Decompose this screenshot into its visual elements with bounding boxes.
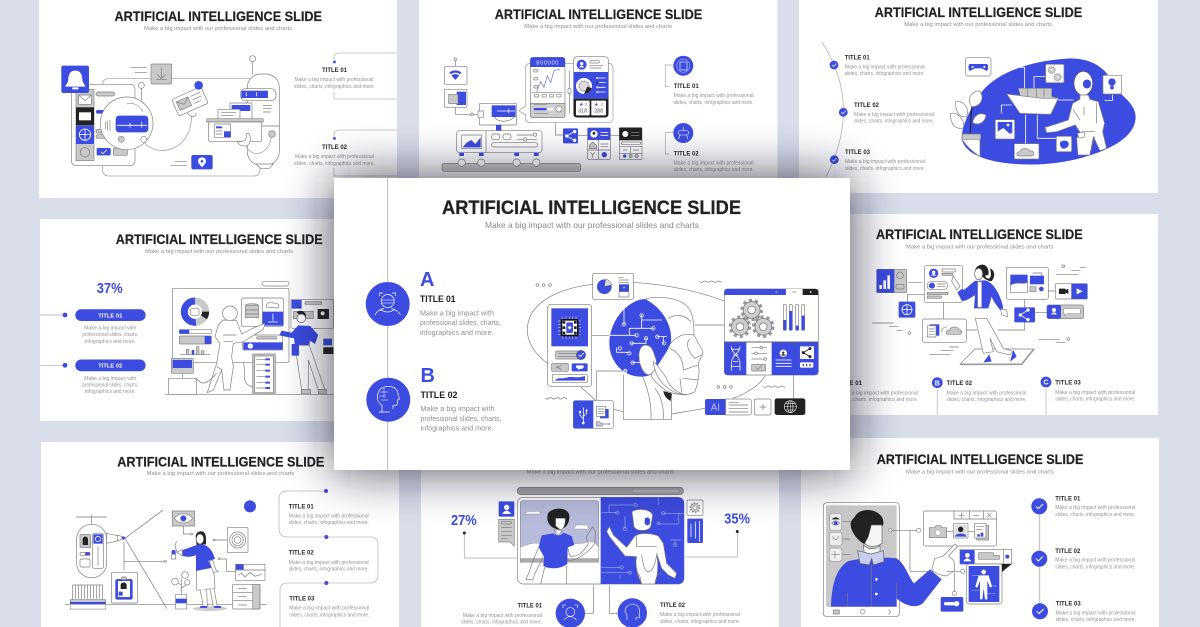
timeline: titles 01 to 03 (1031, 496, 1136, 623)
item B (366, 365, 502, 433)
illustration: AI head with interface modules (527, 273, 818, 428)
item: title 01 with icon (461, 599, 585, 627)
heading: bottom-right slide: ARTIFICIAL INTELLIGENCE SLIDE (877, 452, 1083, 467)
item: title 02 with icon (618, 598, 740, 627)
heading: bottom-left slide: ARTIFICIAL INTELLIGENCE SLIDE (117, 454, 324, 470)
subtitle: middle-left slide: Make a big impact with our professional slides and charts (145, 249, 293, 255)
timeline: titles 01 to 03: Make a big impact with professional (1056, 610, 1136, 616)
stat: 37%: 37% (97, 281, 123, 297)
timeline arc with title items: TITLE 03 (845, 149, 870, 156)
item B: TITLE 02 (420, 390, 458, 400)
item: title 01: slides, charts, infographics and more. (674, 100, 754, 106)
item: title 03 with C marker: slides, charts, infographics and more. (1055, 396, 1135, 402)
icon: robot circle (673, 123, 693, 143)
illustration: data dashboards and machine: 800000 (536, 60, 559, 66)
heading: top-right slide: ARTIFICIAL INTELLIGENCE SLIDE (875, 5, 1082, 20)
heading: center slide: ARTIFICIAL INTELLIGENCE SLIDE (442, 198, 741, 219)
timeline: titles 01 to 03: Make a big impact with professional (1055, 505, 1135, 511)
item: title 01: TITLE 01 (674, 83, 699, 90)
item: title 02 with B marker: B (935, 380, 940, 387)
item: title 03 with C marker: Make a big impact with professional (1055, 390, 1135, 396)
timeline: titles 01 to 03: TITLE 01 (1055, 496, 1081, 502)
heading: middle-left slide: ARTIFICIAL INTELLIGENCE SLIDE (116, 232, 323, 247)
item A: TITLE 01 (420, 294, 456, 304)
callout boxes: titles 01 to 03: slides, charts, infographics and more. (289, 612, 369, 618)
panel: center slide (334, 178, 850, 470)
stat: 35% (685, 512, 750, 557)
subtitle: bottom-middle slide: Make a big impact with our professional slides and charts (527, 470, 674, 476)
illustration: data dashboards and machine: 318 (578, 109, 587, 115)
timeline arc with title items: Make a big impact with professional (854, 112, 934, 118)
callout: title 02: Make a big impact with professional (295, 154, 374, 160)
timeline arc with title items: Make a big impact with professional (845, 64, 925, 70)
callout boxes: titles 01 to 03: TITLE 02 (289, 550, 314, 556)
timeline arc with title items: slides, charts, infographics and more. (845, 71, 925, 77)
item: title 01: Make a big impact with professional (674, 93, 754, 99)
item: title 02 with B marker: Make a big impact with professional (946, 390, 1026, 396)
item: title 02 with B marker: slides, charts, infographics and more. (946, 397, 1026, 403)
vertical timeline line (387, 178, 389, 470)
timeline: titles 01 to 03: Make a big impact with professional (1055, 558, 1135, 564)
callout: title 02 (294, 130, 397, 176)
item: title 02 pill: TITLE 02 (98, 364, 122, 370)
subtitle: middle-right slide: Make a big impact with our professional slides and charts (906, 245, 1054, 251)
subtitle: center slide: Make a big impact with our professional slides and charts (485, 220, 699, 230)
timeline: titles 01 to 03: TITLE 02 (1055, 548, 1081, 555)
callout boxes: titles 01 to 03: TITLE 03 (289, 596, 315, 602)
illustration: woman with floating cards (872, 265, 1087, 364)
illustration: biometrics with woman (65, 500, 267, 611)
subtitle: bottom-right slide: Make a big impact with our professional slides and charts (906, 469, 1054, 475)
callout boxes: titles 01 to 03: Make a big impact with professional (289, 560, 369, 566)
item: title 02 (665, 123, 754, 173)
module: left phone card (548, 304, 592, 387)
item: title 01 (partly hidden): slides, charts, infographics and more. (838, 397, 918, 403)
callout boxes: titles 01 to 03: slides, charts, infographics and more. (289, 520, 369, 526)
item: title 02 pill (40, 360, 146, 395)
subtitle: bottom-left slide: Make a big impact with our professional slides and charts (147, 471, 294, 477)
timeline arc with title items (822, 42, 934, 177)
stat: 27%: 27% (451, 513, 477, 529)
module: gears window (724, 289, 818, 375)
icon: chip circle (673, 56, 693, 76)
module: AI toolbar: AI (711, 403, 720, 414)
timeline arc with title items: Make a big impact with professional (845, 159, 925, 165)
timeline: titles 01 to 03: slides, charts, infographics and more. (1055, 564, 1135, 570)
item: title 01 (partly hidden): Make a big impact with professional (838, 390, 918, 396)
panel: middle-right slide (836, 214, 1158, 415)
item: title 02 with B marker: TITLE 02 (946, 380, 972, 387)
item: title 01 (partly hidden) (836, 380, 918, 403)
callout boxes: titles 01 to 03: Make a big impact with professional (289, 606, 369, 612)
module: AI toolbar (705, 398, 805, 415)
item: title 02: TITLE 02 (674, 150, 699, 158)
subtitle: top-left slide: Make a big impact with our professional slides and charts (144, 26, 292, 32)
item: title 01 pill: infographics and more. (85, 339, 136, 345)
item B: B (420, 365, 435, 387)
panel: bottom-middle slide (421, 460, 779, 627)
item: title 01 with icon: TITLE 01 (518, 602, 542, 610)
item: title 01 with icon: Make a big impact with professional (463, 613, 542, 619)
item: title 02 with icon: Make a big impact with professional (660, 612, 740, 618)
item: title 01 (665, 56, 754, 106)
item: title 02: Make a big impact with professional (674, 160, 754, 166)
item: title 01 with icon: slides, charts, infographics and more. (461, 620, 542, 626)
illustration: robot with tablet (61, 56, 279, 176)
timeline: titles 01 to 03: slides, charts, infographics and more. (1055, 512, 1135, 518)
item B: Make a big impact with (420, 406, 495, 413)
illustration: robot and person at board (165, 281, 333, 394)
shadow behind center slide (334, 178, 850, 470)
icon: face scan circle (366, 282, 410, 326)
timeline arc with title items: slides, charts, infographics and more. (845, 166, 925, 172)
subtitle: top-right slide: Make a big impact with our professional slides and charts (904, 22, 1052, 28)
timeline arc with title items: TITLE 02 (854, 102, 879, 109)
module: USB and files card (573, 401, 613, 428)
heading: top-middle slide: ARTIFICIAL INTELLIGENCE SLIDE (495, 7, 702, 22)
panel: middle-left slide (40, 219, 336, 421)
panel: top-left slide (39, 0, 397, 198)
heading: top-left slide: ARTIFICIAL INTELLIGENCE SLIDE (114, 9, 322, 24)
item B: infographics and more. (420, 426, 494, 433)
callout: title 02: slides, charts, infographics and more. (294, 161, 375, 167)
item: title 02 with B marker (932, 377, 1026, 415)
item: title 02 pill: infographics and more. (85, 389, 136, 395)
item: title 02 pill: professional slides, charts, (82, 382, 138, 388)
heading: middle-right slide: ARTIFICIAL INTELLIGENCE SLIDE (876, 227, 1083, 242)
stat: 35%: 35% (724, 512, 750, 528)
item: title 01 pill: Make a big impact with (84, 326, 137, 332)
panel: top-right slide (799, 0, 1158, 193)
item: title 01 (partly hidden): TITLE 01 (836, 380, 862, 387)
callout boxes: titles 01 to 03: Make a big impact with professional (289, 514, 369, 520)
illustration: data dashboards and machine: 288 (594, 109, 603, 115)
timeline arc with title items: TITLE 01 (845, 54, 870, 62)
module: top chart card (593, 273, 633, 299)
callout: title 02: TITLE 02 (322, 144, 347, 151)
item A (366, 269, 501, 337)
callout boxes: titles 01 to 03: TITLE 01 (289, 504, 314, 510)
item: title 02 with icon: slides, charts, infographics and more. (660, 619, 740, 625)
stat: 27% (451, 513, 517, 558)
icon: AI head circle (366, 378, 410, 422)
item: title 03 with C marker (1041, 377, 1135, 415)
panel: top-middle slide (419, 0, 778, 180)
illustration: robot on blue blob (951, 58, 1136, 164)
item: title 02: slides, charts, infographics and more. (674, 167, 754, 173)
item: title 02 with icon: TITLE 02 (660, 602, 685, 609)
subtitle: top-middle slide: Make a big impact with our professional slides and charts (524, 24, 672, 30)
panel: bottom-right slide (801, 438, 1159, 627)
timeline: titles 01 to 03: slides, charts, infographics and more. (1056, 617, 1136, 623)
callout: title 01 (294, 53, 397, 99)
timeline arc with title items: slides, charts, infographics and more. (854, 118, 934, 124)
item A: professional slides, charts, (420, 320, 501, 327)
item: title 01 pill: professional slides, charts, (82, 332, 138, 338)
callout boxes: titles 01 to 03 (279, 489, 378, 627)
item: title 01 pill (40, 309, 146, 345)
callout: title 01: TITLE 01 (322, 67, 347, 74)
callout: title 01: Make a big impact with professional (294, 77, 374, 83)
callout boxes: titles 01 to 03: slides, charts, infographics and more. (289, 567, 369, 573)
illustration: data dashboards and machine (442, 57, 642, 171)
item: title 03 with C marker: TITLE 03 (1055, 379, 1081, 386)
item B: professional slides, charts, (420, 416, 502, 423)
item A: Make a big impact with (420, 310, 494, 318)
panel: bottom-left slide (41, 442, 399, 627)
item A: A (420, 269, 434, 291)
item: title 01 pill: TITLE 01 (98, 313, 123, 319)
item A: infographics and more. (420, 330, 494, 337)
item: title 02 pill: Make a big impact with (84, 376, 137, 382)
callout: title 01: slides, charts, infographics and more. (294, 84, 375, 90)
illustration: man touching tablet (823, 503, 1012, 617)
timeline: titles 01 to 03: TITLE 03 (1056, 600, 1081, 608)
item: title 03 with C marker: C (1043, 380, 1049, 387)
illustration: human and robot split screen (499, 487, 703, 613)
